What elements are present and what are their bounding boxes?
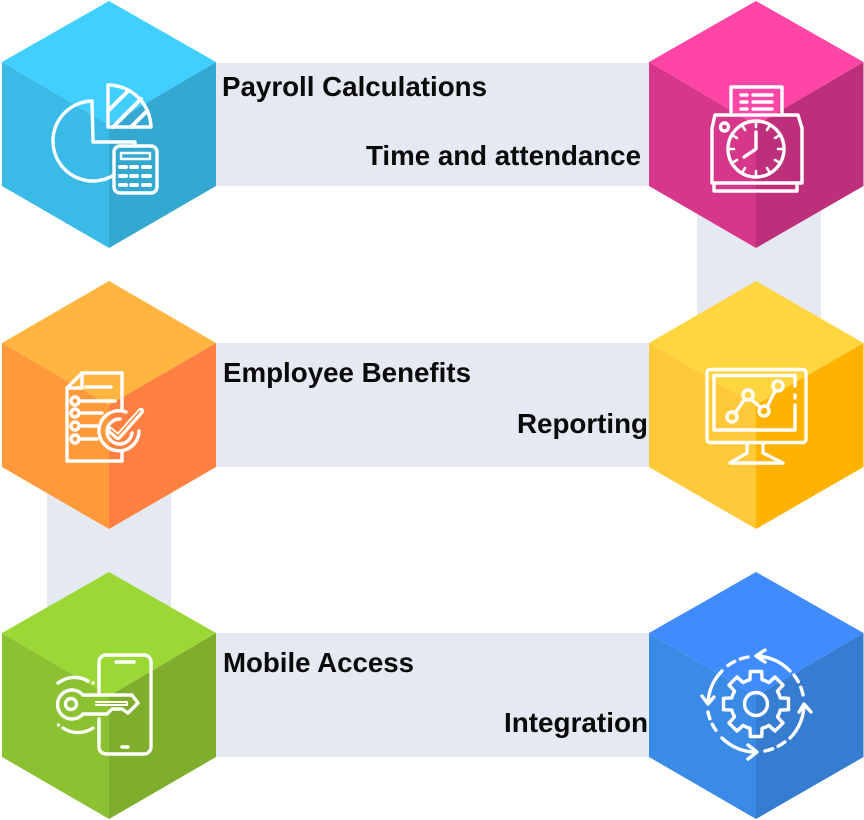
- icon: checklist document: [67, 373, 141, 461]
- cube: payroll calculations: [2, 1, 216, 248]
- icon: gear with cycle arrows: [702, 650, 811, 759]
- cube: employee benefits: [2, 281, 216, 529]
- cube: reporting: [649, 281, 864, 529]
- label: Mobile Access: Mobile Access: [223, 647, 414, 678]
- label: Employee Benefits: Employee Benefits: [223, 357, 471, 388]
- icon: punch clock: [712, 87, 802, 191]
- cube: integration: [649, 572, 864, 819]
- connector band: row 1: [216, 63, 650, 186]
- icon: phone and key: [57, 655, 151, 754]
- cube: time and attendance: [649, 1, 864, 248]
- connector band: right vertical: [697, 186, 821, 336]
- icon: monitor with line chart: [707, 370, 806, 463]
- icon: pie chart and calculator: [53, 85, 157, 193]
- cube: mobile access: [2, 572, 216, 819]
- label: Reporting: Reporting: [517, 408, 648, 439]
- connector band: row 3: [216, 633, 650, 757]
- label: Time and attendance: Time and attendance: [366, 140, 641, 171]
- label: Integration: Integration: [504, 707, 648, 738]
- connector band: left vertical: [47, 490, 171, 620]
- connector band: row 2: [216, 343, 650, 467]
- label: Payroll Calculations: Payroll Calculations: [222, 71, 487, 102]
